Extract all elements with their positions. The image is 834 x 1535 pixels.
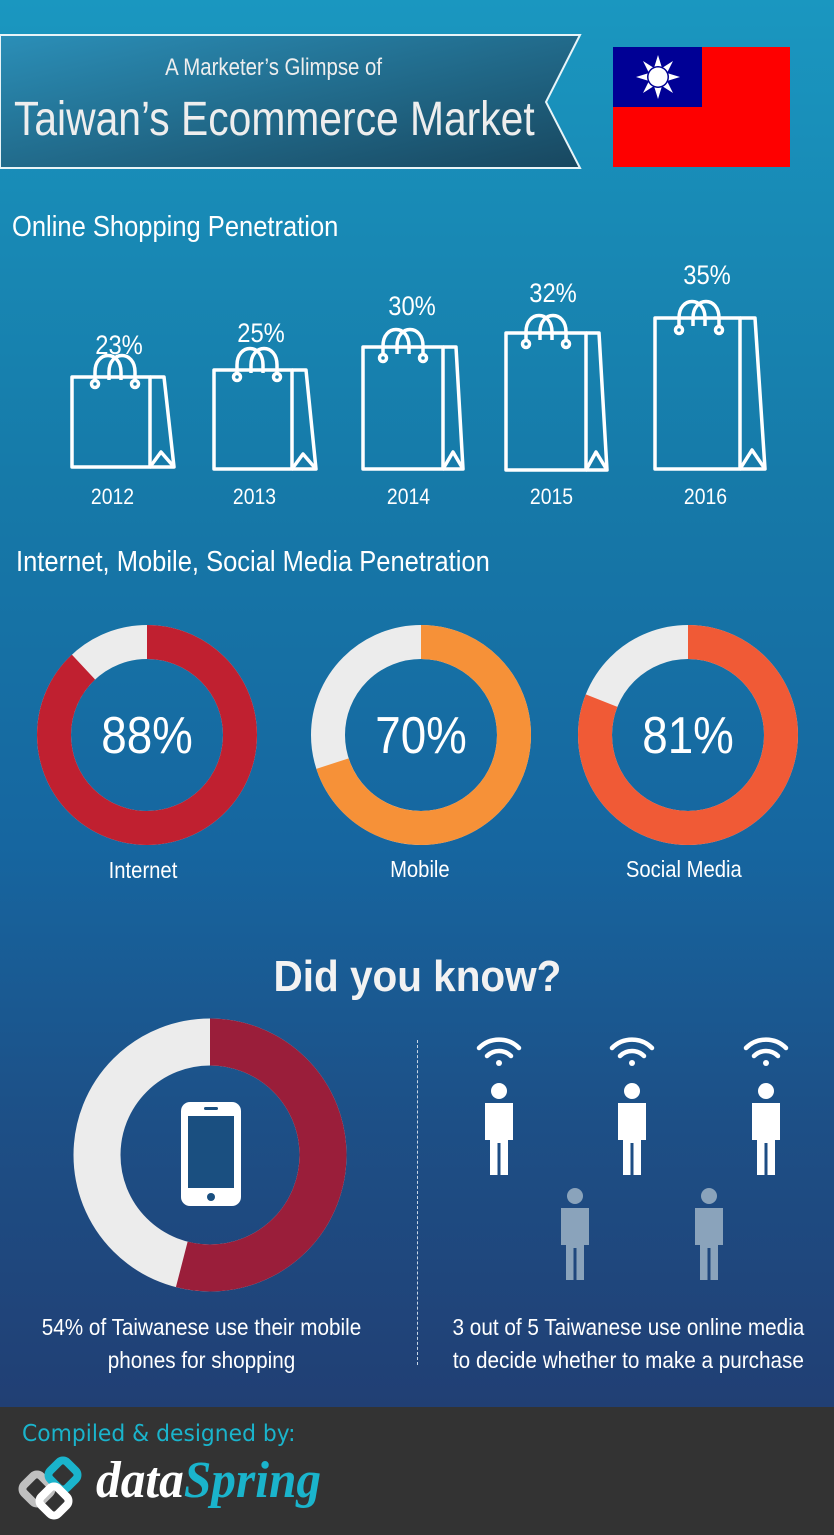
- chart: shopping bags: 30%: [388, 291, 436, 321]
- icon: bag 2016: [655, 302, 765, 469]
- credit text: Compiled & designed by:: [22, 1421, 295, 1447]
- heading: internet mobile social: Internet, Mobile, Social Media Penetration: [16, 546, 490, 578]
- chart: donuts: Mobile: [390, 856, 450, 882]
- text: mobile shopping: phones for shopping: [108, 1347, 296, 1373]
- chart: shopping bags: 32%: [529, 278, 577, 308]
- text: online media: 3 out of 5 Taiwanese use online media: [452, 1314, 804, 1340]
- chart: shopping bags: 23%: [95, 330, 143, 360]
- chart: donuts: [37, 625, 798, 883]
- text: mobile shopping: [42, 1314, 362, 1373]
- icon: Taiwan flag: [613, 47, 790, 167]
- chart: mobile shopping donut: [74, 1018, 346, 1292]
- donut: mobile: [328, 642, 514, 828]
- icon: phone: [181, 1102, 241, 1206]
- header banner: [0, 34, 582, 169]
- chart: shopping bags: 35%: [683, 260, 731, 290]
- chart: shopping bags: [70, 260, 767, 509]
- text: mobile shopping: 54% of Taiwanese use their mobile: [42, 1314, 362, 1340]
- chart: shopping bags: 2012: [91, 484, 134, 509]
- logo: [18, 1456, 82, 1520]
- icon: bag 2015: [506, 316, 607, 470]
- chart: donuts: 81%: [642, 707, 734, 765]
- donut: internet: [54, 642, 240, 828]
- icon: bag 2013: [214, 348, 316, 469]
- heading: online shopping penetration: Online Shopping Penetration: [12, 211, 338, 243]
- chart: shopping bags: 2015: [530, 484, 573, 509]
- heading: did you know: Did you know?: [273, 952, 561, 1001]
- chart: shopping bags: 25%: [237, 318, 285, 348]
- text: online media: [452, 1314, 804, 1373]
- divider: [417, 1040, 418, 1365]
- title: A Marketer’s Glimpse of: [166, 54, 382, 81]
- title: [14, 54, 534, 146]
- chart: donuts: Internet: [109, 857, 177, 883]
- icon group: people: [476, 1037, 788, 1280]
- text: online media: to decide whether to make a purchase: [453, 1347, 803, 1373]
- chart: donuts: Social Media: [626, 856, 742, 882]
- icon: bag 2012: [72, 356, 174, 467]
- logo text: dataSpring: [96, 1452, 321, 1509]
- chart: donuts: 70%: [375, 707, 467, 765]
- chart: donuts: 88%: [101, 707, 193, 765]
- chart: shopping bags: 2013: [233, 484, 276, 509]
- chart: shopping bags: 2016: [684, 484, 727, 509]
- icon: bag 2014: [363, 330, 463, 469]
- donut: social: [595, 642, 781, 828]
- footer: [0, 1407, 834, 1535]
- chart: shopping bags: 2014: [387, 484, 430, 509]
- title: Taiwan’s Ecommerce Market: [14, 93, 534, 146]
